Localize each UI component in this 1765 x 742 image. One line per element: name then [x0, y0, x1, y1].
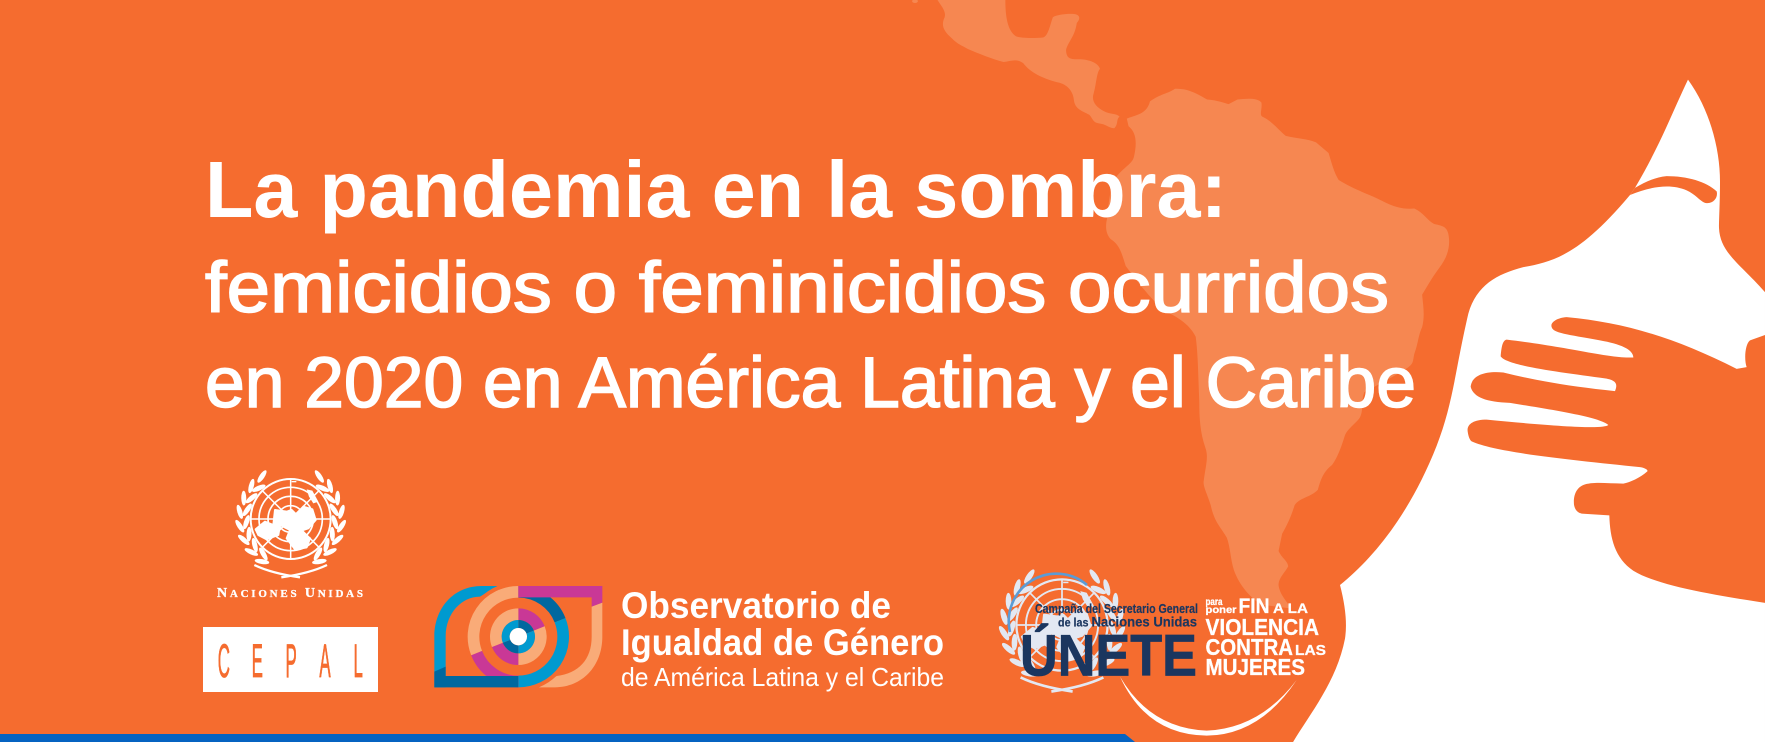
text: Observatorio de Igualdad de Género: Observatorio de [621, 585, 891, 626]
text: para poner fin a la violencia contra las mujeres: para [1206, 596, 1223, 608]
logo: UN emblem of the ÚNETE campaign [997, 568, 1127, 692]
title: en 2020 en América Latina y el Caribe [205, 344, 1416, 423]
title: femicidios o feminicidios ocurridos [205, 249, 1389, 328]
text: para poner fin a la violencia contra las mujeres: A LA [1273, 600, 1308, 616]
logo: CEPAL: L [354, 636, 363, 688]
text: para poner fin a la violencia contra las mujeres [1206, 595, 1326, 680]
logo: CEPAL [203, 627, 378, 692]
text: para poner fin a la violencia contra las mujeres: MUJERES [1206, 654, 1305, 680]
map: Latin America and the Caribbean [912, 0, 1449, 608]
arc: blue ring of the ÚNETE campaign [1009, 574, 1087, 632]
title: La pandemia en la sombra: [205, 145, 1227, 234]
text: Observatorio de Igualdad de Género: de América Latina y el Caribe [621, 662, 944, 692]
logo: CEPAL: A [319, 636, 331, 688]
text: ÚNETE campaign: Campaña del Secretario General [1035, 601, 1198, 616]
logo: CEPAL: C [218, 636, 230, 688]
text: para poner fin a la violencia contra las mujeres: FIN [1238, 595, 1270, 618]
text: Observatorio de Igualdad de Género: Igualdad de Género [621, 622, 944, 663]
text: ÚNETE campaign [1020, 601, 1198, 688]
logo: CEPAL: P [285, 636, 297, 688]
bottom blue bar [0, 734, 1135, 742]
title [205, 145, 1416, 423]
arc: white ring of the ÚNETE campaign [1120, 677, 1297, 736]
logo: Observatorio de Igualdad de Género symbol [434, 582, 602, 691]
text: para poner fin a la violencia contra las mujeres: CONTRA [1206, 634, 1293, 660]
text: para poner fin a la violencia contra las mujeres: VIOLENCIA [1206, 614, 1319, 640]
logo: United Nations emblem [234, 469, 348, 577]
text: Observatorio de Igualdad de Género [621, 585, 944, 692]
text: ÚNETE campaign: ÚNETE [1020, 624, 1197, 688]
text: ÚNETE campaign: de las Naciones Unidas [1058, 614, 1197, 630]
text: para poner fin a la violencia contra las mujeres: poner [1206, 604, 1236, 616]
logo: CEPAL: E [252, 636, 263, 688]
text: para poner fin a la violencia contra las mujeres: LAS [1295, 642, 1326, 659]
label: Naciones Unidas: N ACIONES U NIDAS [217, 586, 363, 601]
illustration: woman silhouette with hand over mouth [1293, 80, 1765, 742]
